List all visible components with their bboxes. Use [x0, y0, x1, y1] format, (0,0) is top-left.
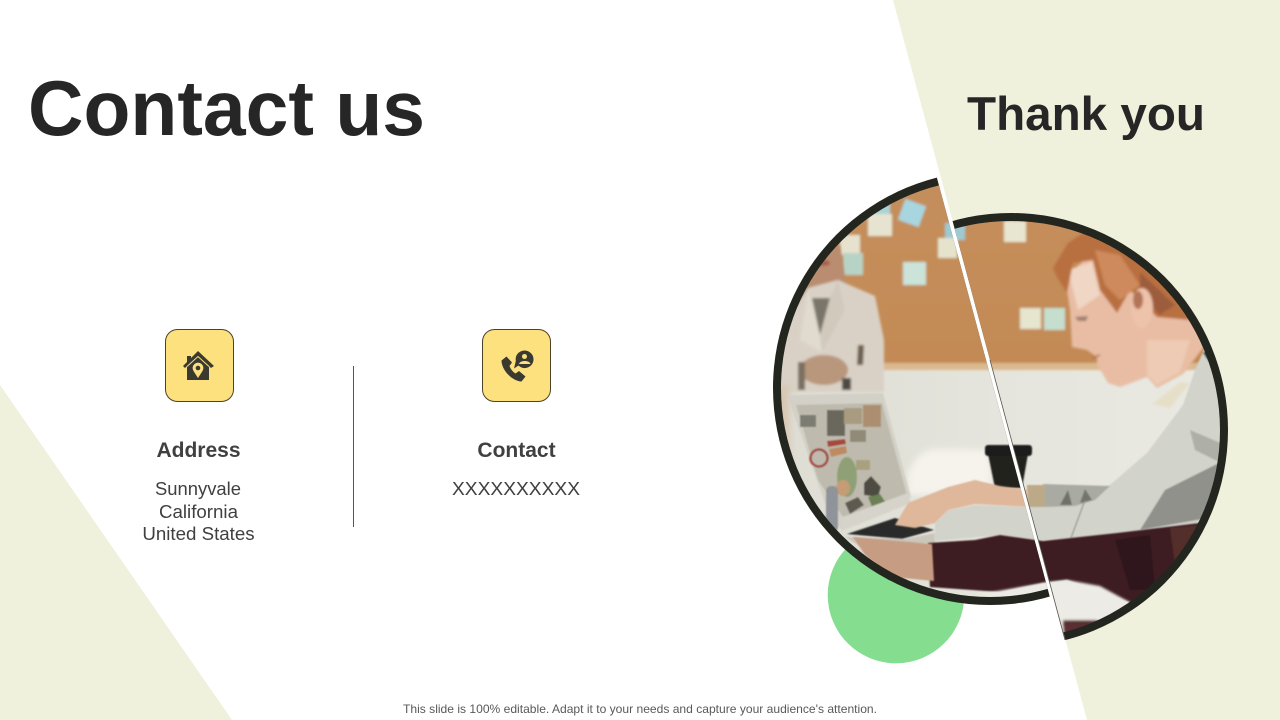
man: blazer: [935, 340, 1225, 541]
panel: contact: [452, 330, 581, 499]
man: head: [1053, 233, 1207, 408]
ring: right half circle: [952, 213, 1228, 640]
icon: house with pin: [166, 330, 234, 402]
divider line: [352, 366, 354, 527]
coffee cup: [985, 445, 1032, 488]
footer note: This slide is 100% editable. Adapt it to your needs and capture your audience's attention.: [403, 702, 877, 716]
green circle: [828, 527, 964, 663]
text: address lines: United States: [142, 523, 255, 544]
desk backdrop and chair: [781, 384, 992, 496]
background: cream bottom-left triangle: [0, 385, 232, 720]
left forearm hand: [853, 537, 934, 581]
icon: phone with contact bubble: [482, 330, 550, 402]
ring: left half circle: [773, 178, 1050, 605]
woman in blazer: [775, 245, 884, 392]
man: dark sleeve arm: [928, 523, 1215, 604]
heading: contact: Contact: [477, 439, 556, 462]
white foreground object: [987, 578, 1131, 632]
panel: address: [142, 330, 255, 544]
title: Contact us: [28, 64, 425, 152]
text: address lines: [142, 478, 255, 544]
text: address lines: Sunnyvale: [155, 478, 241, 499]
cork board and notes: [796, 185, 1204, 372]
text: address lines: California: [159, 501, 239, 522]
text: contact number: XXXXXXXXXX: [452, 478, 581, 499]
man: typing hand: [895, 480, 1028, 528]
photo hairline along divider: [990, 360, 1065, 640]
heading: address: Address: [156, 439, 241, 462]
background: cream right panel: [893, 0, 1280, 720]
photo: man working at laptop: [781, 185, 1220, 632]
laptop: [787, 393, 935, 546]
heading: thank you: Thank you: [967, 88, 1205, 141]
